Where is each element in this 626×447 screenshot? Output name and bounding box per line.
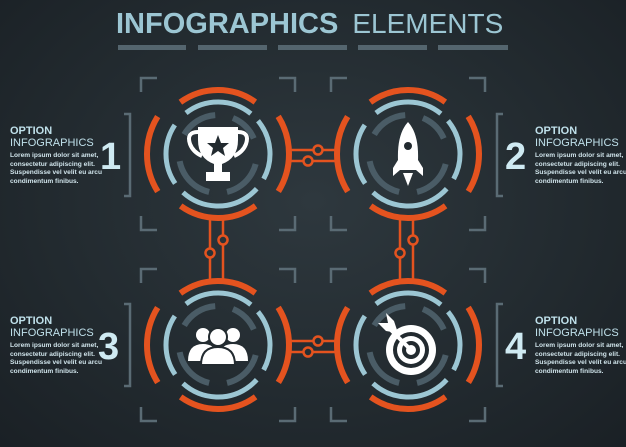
title: INFOGRAPHICS ELEMENTS (116, 8, 503, 40)
text 1: Lorem ipsum dolor sit amet, consectetur adipiscing elit. Suspendisse vel velit eu arcu condimentum finibus. (10, 152, 102, 185)
connector: 3 to 4 (290, 336, 337, 356)
text 2: Lorem ipsum dolor sit amet, consectetur adipiscing elit. Suspendisse vel velit eu arcu condimentum finibus. (535, 152, 626, 185)
connector: 1 to 2 (290, 146, 337, 166)
text 3: INFOGRAPHICS (10, 327, 94, 339)
number 4: 4 (505, 326, 526, 368)
ring 1 (120, 56, 316, 252)
text 1: OPTION (10, 125, 52, 137)
text 4: INFOGRAPHICS (535, 327, 619, 339)
icon: target (378, 313, 436, 375)
text 4: OPTION (535, 315, 577, 327)
text 3: Lorem ipsum dolor sit amet, consectetur adipiscing elit. Suspendisse vel velit eu arcu condimentum finibus. (10, 342, 102, 375)
connector: 2 to 4 (396, 220, 418, 281)
ring 4 (310, 247, 506, 443)
text 3: OPTION (10, 315, 52, 327)
text 2: OPTION (535, 125, 577, 137)
text 2 (535, 125, 626, 185)
text 1: INFOGRAPHICS (10, 137, 94, 149)
icon: team (188, 328, 248, 365)
icon: rocket (393, 122, 423, 186)
connector: 1 to 3 (206, 220, 228, 281)
text 3 (10, 315, 102, 375)
ring 3 (120, 247, 316, 443)
text 4: Lorem ipsum dolor sit amet, consectetur adipiscing elit. Suspendisse vel velit eu arcu condimentum finibus. (535, 342, 626, 375)
text 2: INFOGRAPHICS (535, 137, 619, 149)
number 3: 3 (98, 326, 119, 368)
number 2: 2 (505, 136, 526, 178)
icon: trophy (189, 127, 247, 181)
text 4 (535, 315, 626, 375)
side brackets (124, 114, 503, 386)
number 1: 1 (100, 136, 121, 178)
text 1 (10, 125, 102, 185)
ring 2 (310, 56, 506, 252)
